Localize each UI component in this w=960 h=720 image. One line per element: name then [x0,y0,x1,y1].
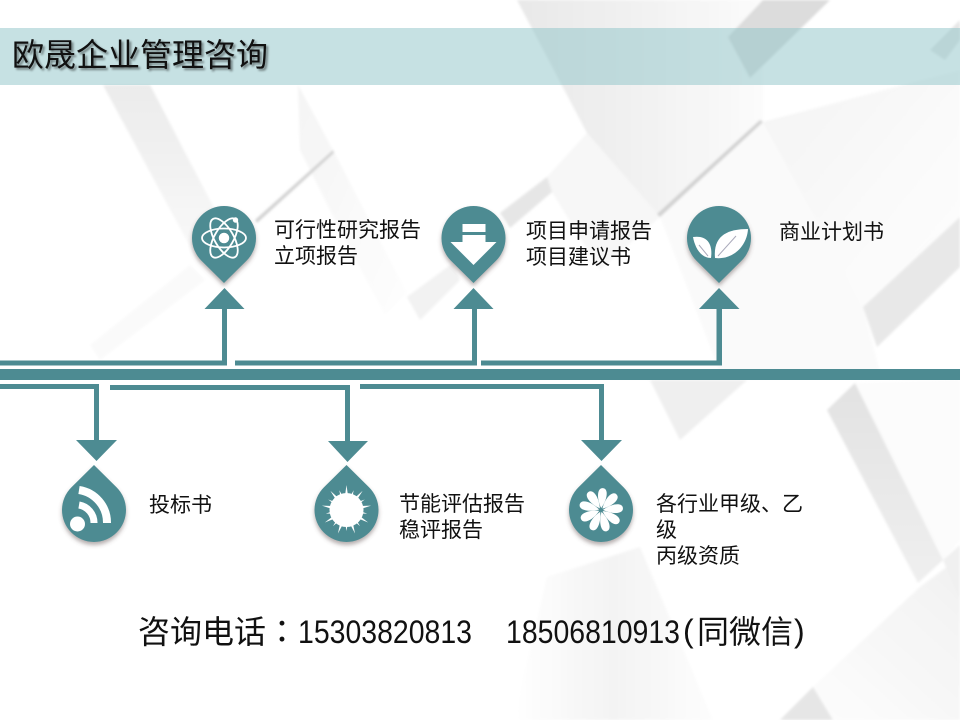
label: feasibility report [274,219,421,268]
label: project application: 项目申请报告 [526,220,652,243]
contact phone line: 15303820813 [298,614,472,650]
label: qualifications: 丙级资质 [656,545,740,568]
pin icon: atom [192,206,256,283]
label: qualifications [656,493,803,568]
label: energy assessment [399,493,525,542]
arrow: down to qualifications [360,384,622,461]
label: energy assessment: 节能评估报告 [399,493,525,516]
label: business plan: 商业计划书 [779,221,884,244]
drop icon: flower [569,465,633,542]
title: 欧晟企业管理咨询 [12,37,268,73]
label: qualifications: 各行业甲级、乙 [656,493,803,516]
drop icon: starburst [314,465,378,542]
contact phone line: 同微信 [697,614,793,650]
label: bid document: 投标书 [149,494,212,517]
pin icon: leaves [687,206,751,283]
label: project application: 项目建议书 [526,246,631,269]
label: feasibility report: 立项报告 [274,245,358,268]
arrow: down to bid document [0,384,117,461]
label: feasibility report: 可行性研究报告 [274,219,421,242]
pin icon: download arrow [442,206,506,283]
contact phone line: ) [794,613,805,649]
contact phone line: ( [683,613,694,649]
label: project application [526,220,652,269]
arrow: up to project application [235,288,494,366]
arrow: down to energy assessment [110,385,368,462]
contact phone line: 咨询电话 [138,614,266,650]
arrow: up to business plan [481,288,740,366]
contact phone line: ： [266,607,298,653]
arrow: up to feasibility report [0,288,244,366]
label: qualifications: 级 [656,519,677,542]
contact phone line: 18506810913 [506,614,680,650]
label: energy assessment: 稳评报告 [399,519,483,542]
title banner [0,28,960,85]
main horizontal bar [0,369,960,380]
drop icon: rss [62,465,126,542]
